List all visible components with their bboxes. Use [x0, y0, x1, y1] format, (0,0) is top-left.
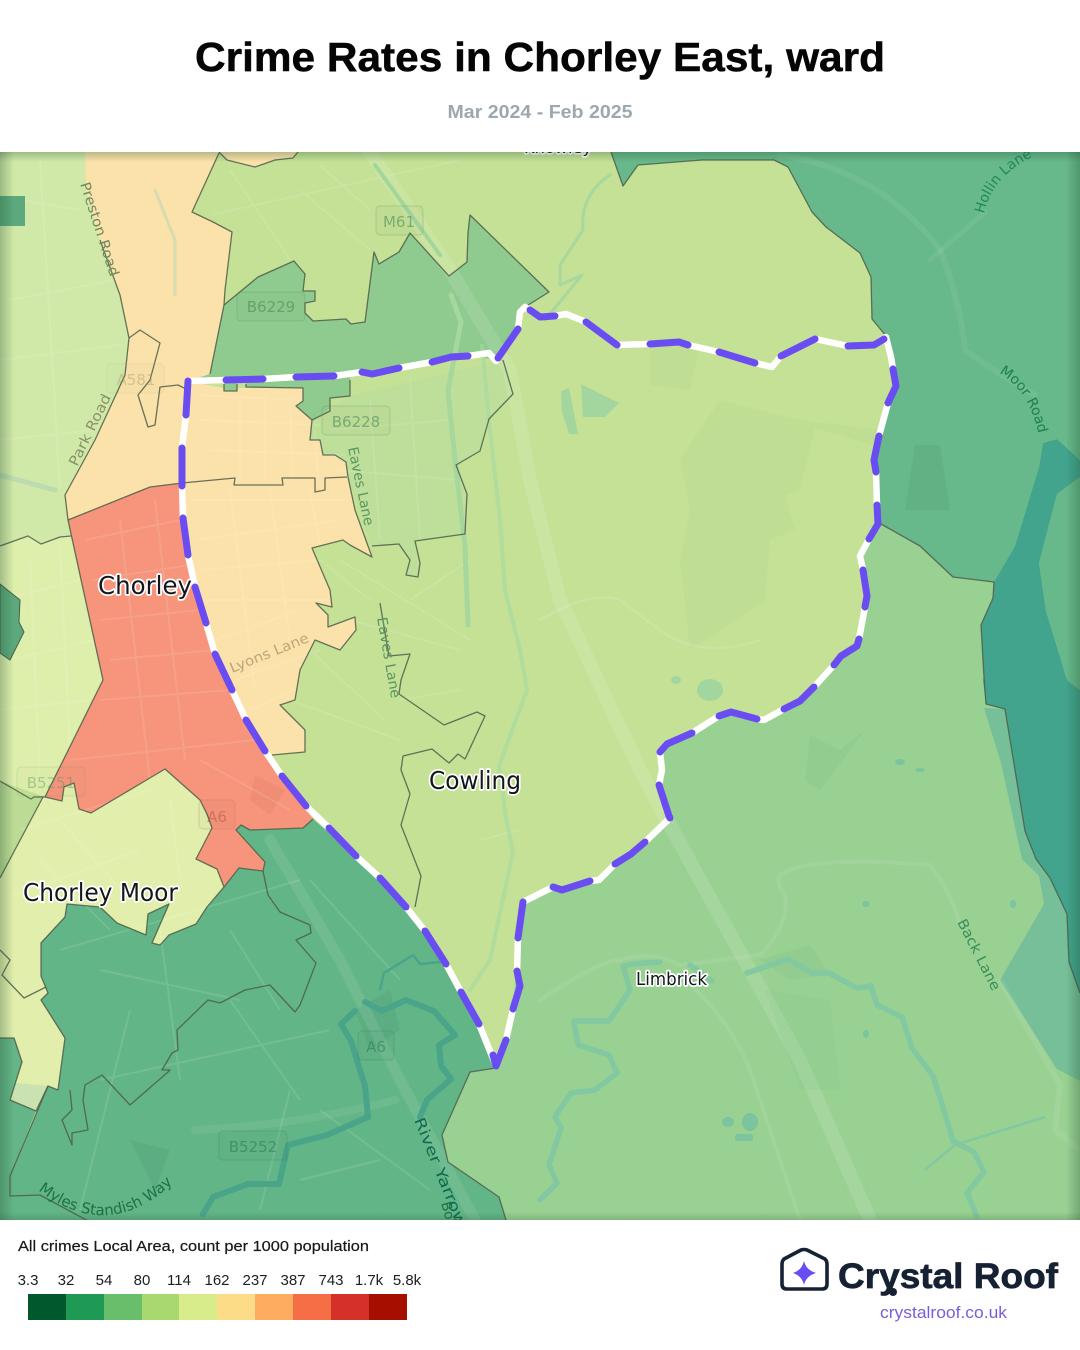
road badge: B6228 — [322, 406, 390, 435]
legend tick labels: 387 — [280, 1272, 306, 1289]
map edge vignette — [0, 152, 1080, 1220]
region: north medium green — [188, 215, 549, 381]
legend tick labels: 32 — [58, 1272, 74, 1289]
place label: Cowling: Cowling — [429, 766, 521, 795]
street label: Hollin Lane: Hollin Lane — [974, 152, 1032, 212]
ponds — [561, 384, 723, 701]
region: teal high-contrast green — [981, 439, 1080, 993]
legend tick labels: 114 — [167, 1272, 191, 1289]
legend tick labels: 3.3 — [18, 1272, 38, 1289]
street label: Park Road: Park Road — [66, 392, 115, 469]
field texture — [130, 345, 950, 1190]
road badge: A6 south — [358, 1031, 394, 1060]
region: Chorley town centre red — [45, 483, 313, 887]
place label: Limbrick: Limbrick — [636, 970, 708, 990]
road badge: B6228: B6228 — [332, 413, 380, 431]
road badge: A6 north: A6 — [207, 808, 227, 826]
region: eastern dark green strip — [1039, 477, 1080, 690]
legend tick labels: 1.7k — [355, 1272, 384, 1289]
place label: Knowley clipped at top: Knowley — [524, 139, 592, 157]
river through Limbrick — [540, 959, 984, 1217]
legend tick labels: 5.8k — [393, 1272, 422, 1289]
road badge: A6 south: A6 — [366, 1038, 386, 1056]
region: small patch on boundary — [224, 383, 237, 391]
road badge: B5252 — [219, 1131, 287, 1160]
road badge: M61 — [376, 206, 423, 235]
region: wedge west of Chorley Moor — [0, 781, 43, 878]
subtitle: date range: Mar 2024 - Feb 2025 — [448, 101, 632, 122]
region: south-east medium green — [442, 524, 1080, 1220]
logo y keyhole — [889, 1288, 897, 1296]
region: middle light green — [317, 409, 330, 417]
icon: house with star — [782, 1250, 827, 1289]
region: southern dark green — [10, 819, 506, 1220]
website link: crystalroof.co.uk — [880, 1304, 1008, 1322]
logo: Crystal Roof — [782, 1250, 1058, 1322]
region: pale patch south of Chorley Moor — [10, 1083, 48, 1111]
place label: Chorley Moor: Chorley Moor — [23, 878, 179, 907]
region: town centre yellow — [65, 152, 232, 520]
street label: clipped road name: Bolton — [437, 1200, 464, 1248]
legend — [18, 1239, 422, 1320]
legend tick labels: 237 — [242, 1272, 268, 1289]
ward boundary: purple dashes — [182, 310, 896, 1066]
road badge: A581 — [107, 364, 164, 393]
region: dark green corner lower left — [0, 1038, 36, 1220]
road badge: B6229 — [237, 292, 305, 321]
ward and area border lines — [0, 152, 1080, 1222]
region: darker fringe in south-east — [984, 708, 1080, 1081]
small dark green area patches — [0, 196, 25, 660]
region: yellow east of ward boundary — [182, 381, 372, 755]
region: far-left pale green — [0, 152, 129, 546]
title: Crime Rates in Chorley East, ward — [195, 34, 885, 80]
logo wordmark: Crystal Roof — [838, 1257, 1058, 1296]
legend colour scale — [28, 1294, 407, 1320]
road badge: M61: M61 — [383, 213, 415, 231]
legend title: All crimes Local Area, count per 1000 population — [18, 1239, 369, 1255]
drain — [925, 1117, 1045, 1170]
street label: Back Lane: Back Lane — [953, 917, 1003, 993]
brook — [380, 955, 441, 990]
legend tick labels: 743 — [318, 1272, 344, 1289]
street label: River Yarrow: River Yarrow — [410, 1115, 470, 1229]
street label: Lyons Lane: Lyons Lane — [228, 630, 311, 677]
street label: Myles Standish Way: Myles Standish Way — [40, 1177, 171, 1216]
road badge: A581: A581 — [117, 371, 155, 389]
region: north-east dark green — [611, 152, 1080, 582]
road badge: A6 north — [199, 800, 235, 829]
region: yellow blob at top — [219, 152, 298, 167]
River Yarrow — [203, 1000, 455, 1214]
road badge: B5251: B5251 — [27, 774, 75, 792]
railway and stream stripes — [0, 165, 610, 990]
region: patch below ward boundary — [246, 376, 350, 420]
street label: Eaves Lane south: Eaves Lane — [373, 616, 403, 699]
road badge: B5251 — [17, 767, 85, 796]
road badge: B5252: B5252 — [229, 1138, 277, 1156]
street label: Preston Road: Preston Road — [76, 180, 122, 278]
motorway and main road stripes — [195, 152, 1080, 1220]
region: Chorley Moor pale yellow-green — [0, 769, 224, 1111]
legend tick labels — [18, 1272, 422, 1289]
street label: Eaves Lane north: Eaves Lane — [344, 446, 376, 527]
town street grid — [0, 160, 520, 1210]
region: west pale yellow-green — [0, 536, 103, 797]
legend tick labels: 80 — [134, 1272, 150, 1289]
road badge: B6229: B6229 — [247, 298, 295, 316]
ward boundary: white base line — [182, 307, 896, 1066]
map base: light green ward fill — [0, 152, 1080, 1220]
street label: Moor Road: Moor Road — [1000, 365, 1048, 432]
place label: Chorley: Chorley — [98, 571, 192, 600]
legend tick labels: 162 — [204, 1272, 230, 1289]
legend tick labels: 54 — [96, 1272, 112, 1289]
